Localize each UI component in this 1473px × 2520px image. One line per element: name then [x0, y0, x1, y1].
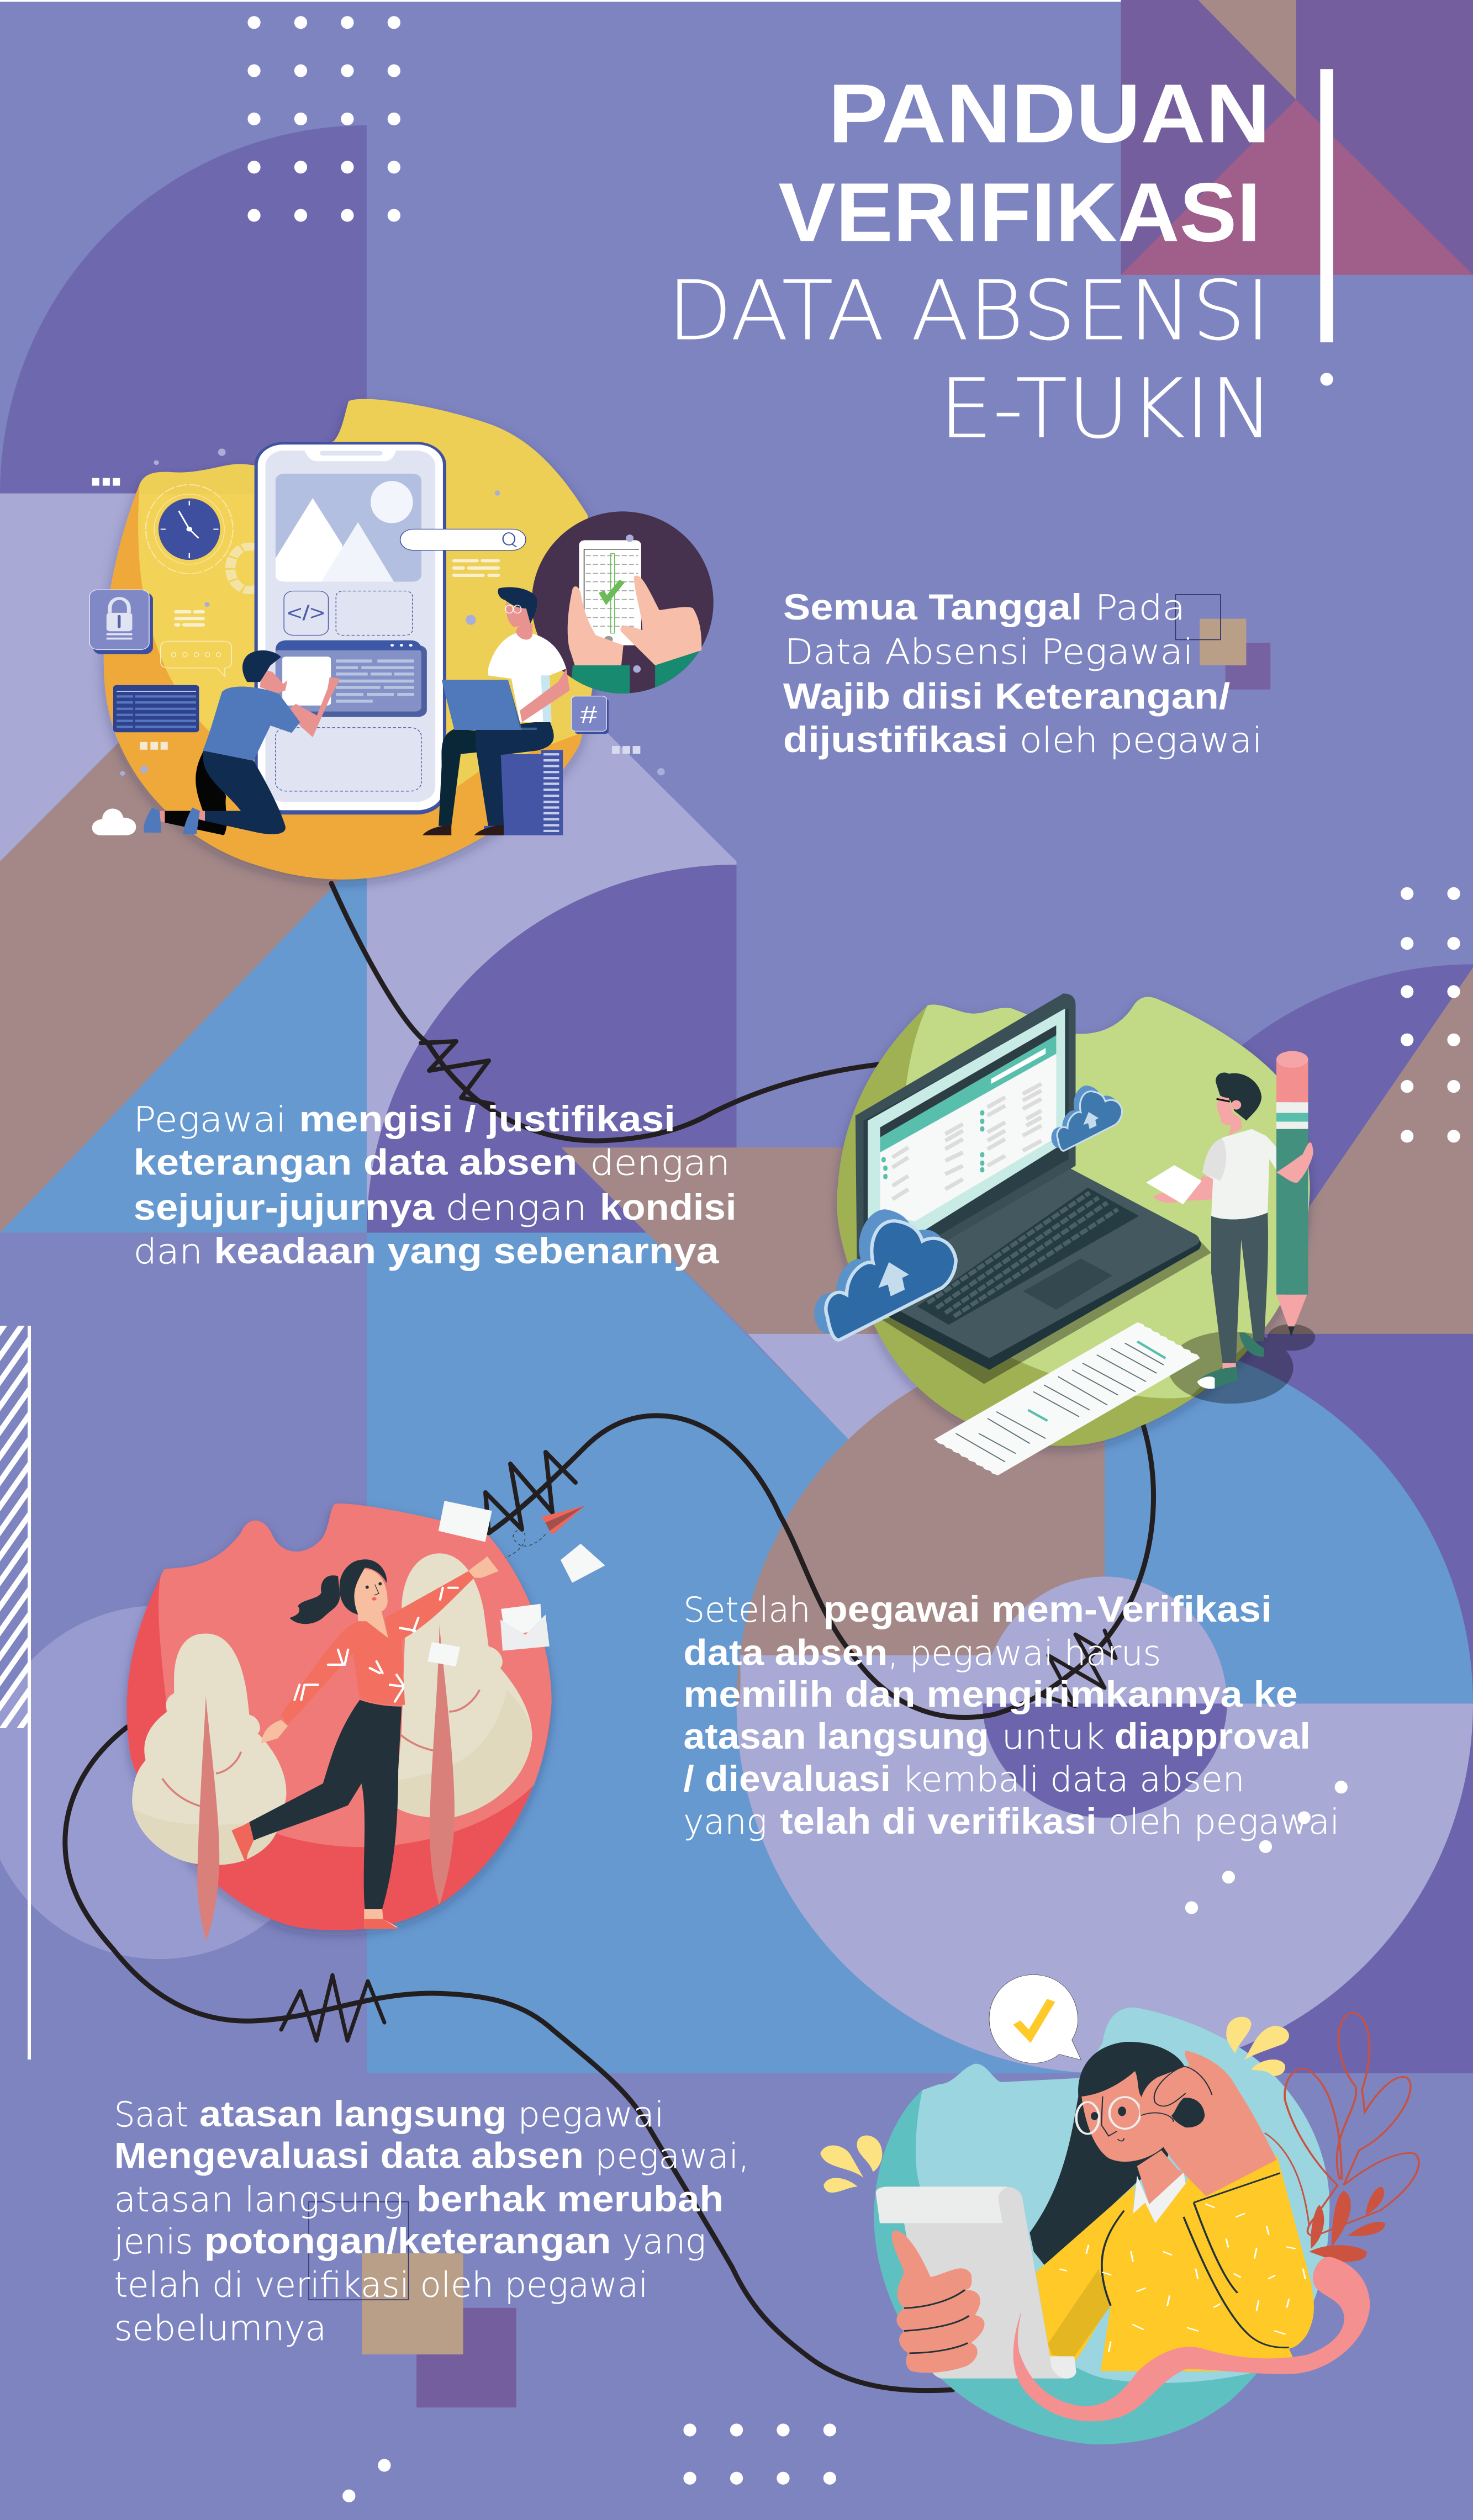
connector curve: step 2 to step 3: [485, 1416, 1153, 1717]
blob: red: [127, 1503, 552, 1930]
code panel: [113, 685, 199, 732]
paper held: [876, 2187, 1076, 2379]
tree left: [132, 1634, 286, 1941]
text block: step 4: Mengevaluasi data absen: [114, 2136, 584, 2176]
text block: step 3: , pegawai harus: [888, 1633, 1161, 1673]
cloud upload small: [1051, 1086, 1122, 1151]
laptop: [856, 993, 1211, 1384]
text block: step 3: data absen: [683, 1632, 888, 1672]
search bar: [400, 529, 526, 550]
title: E-TUKIN: [939, 362, 1274, 457]
text block: step 2: dan: [134, 1231, 203, 1272]
text block: step 3: atasan langsung: [683, 1716, 989, 1756]
blob: yellow and orange: [97, 399, 598, 888]
text lines on blob: [176, 560, 498, 625]
text block: step 4: sebelumnya: [114, 2308, 326, 2348]
title: [667, 67, 1274, 457]
text block: step 1: Pada: [1095, 587, 1185, 628]
text block: step 4: yang: [622, 2221, 706, 2262]
pencil: [1276, 1051, 1313, 1336]
text block: step 2: [134, 1099, 737, 1272]
text block: step 1: dijustifikasi: [783, 719, 1009, 760]
text block: step 1: Semua Tanggal: [783, 587, 1083, 627]
text block: step 2: keterangan data absen: [134, 1142, 577, 1183]
pink ribbon: [1013, 2257, 1370, 2421]
connector curve: step 3 to step 4: [65, 1727, 953, 2391]
text block: step 4: atasan langsung: [199, 2094, 506, 2134]
text block: step 4: potongan/keterangan: [204, 2221, 611, 2261]
man: [1146, 1072, 1289, 1389]
dots: top left grid: [247, 16, 400, 222]
text block: step 2: mengisi / justifikasi: [299, 1099, 675, 1139]
envelopes: [427, 1501, 605, 1666]
magnified phone in hands: [532, 511, 714, 696]
text block: step 3: [683, 1589, 1339, 1842]
text block: step 2: kondisi: [600, 1187, 737, 1227]
title accent bar and dot: [1320, 69, 1333, 386]
text block: step 2: dengan: [590, 1143, 730, 1183]
text block: step 1: Wajib diisi Keterangan/: [783, 676, 1230, 717]
woman: [231, 1556, 499, 1929]
text block: step 1: Data Absensi Pegawai: [785, 632, 1193, 672]
chat bubble: [161, 641, 231, 676]
face: [1081, 2071, 1163, 2162]
collar: [1133, 2172, 1186, 2223]
title: PANDUAN: [828, 67, 1270, 161]
yellow splashes: [820, 2017, 1289, 2193]
text block: step 3: kembali data absen: [902, 1759, 1245, 1799]
dots: diagonal and bottom: [342, 1781, 1348, 2502]
connector curve: step 1 to step 2: [331, 883, 878, 1141]
text block: step 4: berhak merubah: [416, 2179, 724, 2219]
text block: step 3: oleh pegawai: [1108, 1802, 1339, 1842]
cloud icon: [92, 808, 136, 835]
small dots: [120, 448, 665, 776]
phone: </>: [287, 602, 325, 625]
text block: step 4: pegawai,: [595, 2136, 749, 2177]
text block: step 4: jenis: [113, 2221, 193, 2262]
hatched strip and vertical line: [0, 1326, 31, 2060]
text block: step 4: Saat: [114, 2094, 188, 2135]
holding hand: [892, 2231, 985, 2373]
text block: step 1: oleh pegawai: [1020, 720, 1263, 760]
text block: step 4: [113, 2094, 749, 2348]
blob: green: [837, 997, 1310, 1446]
text block: step 3: pegawai mem-Verifikasi: [823, 1589, 1272, 1629]
text block: step 2: dengan: [446, 1188, 587, 1228]
text block: step 3: Setelah: [683, 1590, 810, 1630]
illustration: phone app team: [72, 399, 714, 916]
speech bubble with check: [989, 1974, 1081, 2063]
title: DATA ABSENSI: [667, 263, 1270, 359]
cloud upload big: [814, 1209, 956, 1340]
hash card: [572, 696, 609, 734]
glasses and eyes: [1076, 2097, 1141, 2141]
sweater: [1036, 2155, 1314, 2371]
title: VERIFIKASI: [778, 166, 1261, 260]
neck: [1137, 2150, 1184, 2204]
phone: [255, 442, 446, 814]
text block: step 3: diapproval: [1115, 1716, 1311, 1756]
decorative squares top: [1175, 595, 1270, 690]
decorative squares bottom: [309, 2202, 516, 2407]
paper plane: [505, 1506, 585, 1558]
square markers: [92, 478, 640, 754]
hash card: #: [580, 701, 598, 728]
man seated: [423, 587, 570, 835]
text block: step 3: untuk: [1002, 1717, 1105, 1757]
text block: step 4: pegawai: [518, 2094, 664, 2135]
text block: step 4: atasan langsung: [114, 2179, 404, 2220]
man kneeling: [144, 650, 340, 835]
text block: step 3: yang: [683, 1802, 767, 1842]
dots: right grid: [1401, 887, 1460, 1143]
floor shadows: [1168, 1324, 1315, 1404]
text block: step 1: [783, 587, 1263, 760]
illustration: woman sending letters: [127, 1501, 605, 1941]
plant: [1265, 2013, 1419, 2262]
illustration: woman checking document: [820, 1974, 1419, 2444]
blob: teal: [874, 2008, 1329, 2444]
tree right: [395, 1553, 532, 1904]
clock and gears: [146, 485, 268, 590]
receipt: [934, 1322, 1200, 1475]
illustration: laptop and man with pencil: [814, 993, 1315, 1475]
hair back: [1029, 2042, 1190, 2267]
text block: step 2: sejujur-jujurnya: [134, 1187, 435, 1227]
text block: step 2: keadaan yang sebenarnya: [214, 1231, 719, 1271]
lock card: [89, 590, 153, 654]
raised hand: [1139, 2051, 1277, 2196]
text block: step 3: telah di verifikasi: [780, 1801, 1097, 1841]
text block: step 3: memilih dan mengirimkannya ke: [683, 1674, 1298, 1714]
text block: step 2: Pegawai: [134, 1099, 286, 1140]
text block: step 3: / dievaluasi: [683, 1759, 891, 1799]
text block: step 4: telah di verifikasi oleh pegawai: [114, 2264, 648, 2305]
